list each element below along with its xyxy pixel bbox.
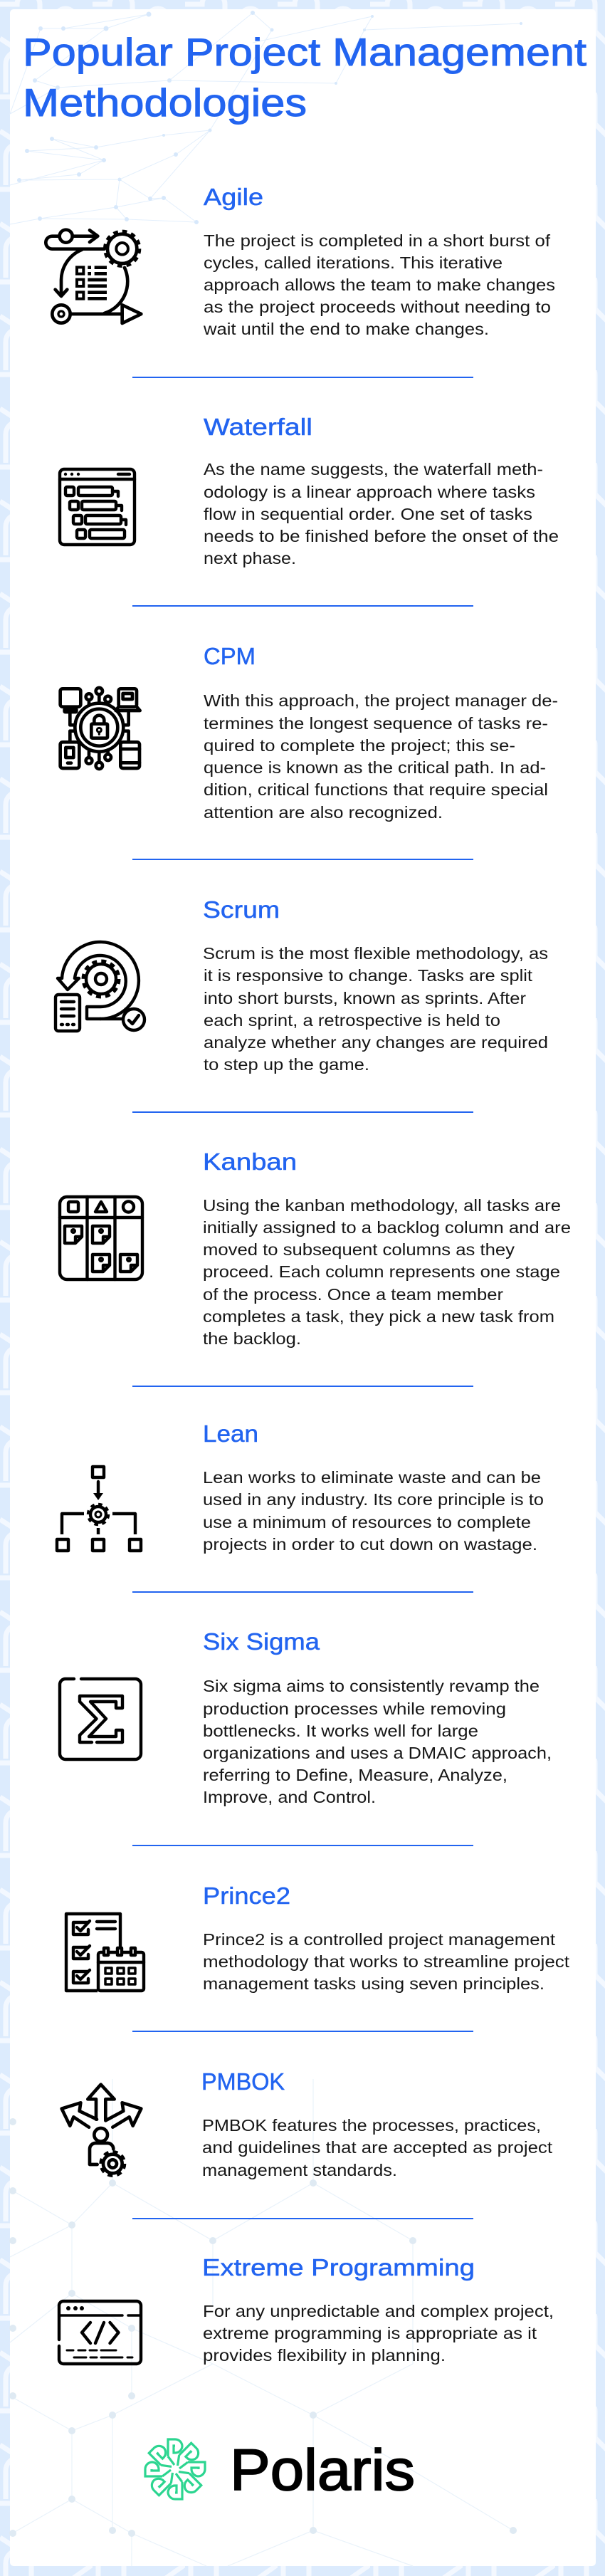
heading: Prince2: Prince2 [203,1883,290,1909]
text: PMBOK description: management standards. [202,2161,397,2179]
icon: waterfall chart window [60,469,135,545]
text: Scrum description: it is responsive to change. Tasks are split [204,966,533,985]
background network: bottom hexagons [9,2079,517,2566]
text: Waterfall description [204,460,559,567]
icon: critical path network lock [60,688,140,769]
text: Waterfall description: odology is a linear approach where tasks [204,483,535,501]
heading: PMBOK: PMBOK [201,2068,285,2095]
icon: sprint cycle gear [56,942,144,1031]
icon: code window [59,2301,141,2364]
text: Kanban description [203,1196,571,1348]
icon: checklist and calendar [66,1914,144,1991]
text: Waterfall description: next phase. [204,549,296,567]
text: CPM description: With this approach, the project manager de- [204,691,558,710]
title: Methodologies [23,80,307,125]
text: Six Sigma description: bottlenecks. It works well for large [203,1722,478,1740]
text: Six Sigma description: Six sigma aims to consistently revamp the [203,1677,540,1695]
background network: top [10,11,522,224]
text: Six Sigma description: referring to Define, Measure, Analyze, [203,1766,507,1784]
text: PMBOK description: PMBOK features the processes, practices, [202,2116,541,2135]
panel: Agile [46,184,555,338]
text: CPM description: dition, critical functions that require special [204,780,548,799]
text: Waterfall description: needs to be finished before the onset of the [204,527,559,545]
text: Agile description: as the project proceeds without needing to [204,298,551,316]
text: Scrum description [203,944,548,1074]
text: Kanban description: proceed. Each column represents one stage [203,1262,560,1281]
text: Agile description: approach allows the team to make changes [204,276,555,294]
wordmark: Polaris [230,2438,415,2503]
heading: Kanban: Kanban [203,1148,297,1175]
text: Six Sigma description: organizations and uses a DMAIC approach, [203,1744,552,1762]
text: Agile description: The project is completed in a short burst of [204,231,551,250]
icon: Polaris pinwheel [145,2439,205,2499]
heading: Scrum: Scrum [203,896,280,923]
text: Scrum description: analyze whether any changes are required [204,1033,548,1052]
icon: lean process tree [57,1467,141,1551]
panel: Extreme Programming [59,2254,554,2365]
text: PMBOK description [202,2116,553,2179]
text: CPM description: quence is known as the critical path. In ad- [204,758,546,777]
text: Prince2 description: management tasks using seven principles. [203,1974,544,1993]
text: Six Sigma description: production processes while removing [203,1700,506,1718]
heading: Waterfall: Waterfall [204,414,312,440]
text: Six Sigma description [203,1677,552,1806]
text: Agile description [203,231,555,338]
text: Kanban description: of the process. Once a team member [203,1285,503,1304]
text: Lean description: used in any industry. Its core principle is to [203,1490,544,1509]
panel: Scrum [56,896,548,1074]
text: Kanban description: initially assigned to a backlog column and are [203,1218,571,1237]
heading: Six Sigma: Six Sigma [203,1628,320,1655]
text: CPM description [204,691,558,822]
text: Extreme Programming description [203,2302,554,2365]
text: Lean description: projects in order to cut down on wastage. [203,1535,537,1554]
text: Prince2 description: Prince2 is a controlled project management [203,1930,556,1949]
text: Extreme Programming description: extreme programming is appropriate as it [203,2324,537,2342]
panel: PMBOK [62,2068,553,2179]
text: Lean description [203,1468,544,1554]
icon: sigma in frame [60,1679,141,1759]
text: Agile description: wait until the end to make changes. [203,320,489,338]
text: Lean description: use a minimum of resources to complete [203,1513,531,1532]
text: Scrum description: to step up the game. [204,1055,369,1074]
icon: person choosing directions [62,2085,141,2176]
text: Prince2 description [203,1930,570,1993]
panel: Lean [57,1420,544,1554]
text: CPM description: attention are also recognized. [204,803,443,822]
heading: Agile: Agile [204,184,263,210]
title [23,30,586,125]
text: PMBOK description: and guidelines that are accepted as project [202,2138,553,2157]
text: Prince2 description: methodology that works to streamline project [203,1952,570,1971]
text: Extreme Programming description: provides flexibility in planning. [203,2346,446,2365]
text: Agile description: cycles, called iterations. This iterative [204,253,503,272]
heading: Lean: Lean [203,1420,258,1447]
text: Scrum description: into short bursts, known as sprints. After [204,989,526,1007]
panel: Six Sigma [60,1628,552,1806]
icon: kanban board [60,1197,142,1279]
text: Six Sigma description: Improve, and Control. [203,1788,376,1806]
heading: Extreme Programming: Extreme Programming [202,2254,475,2281]
text: Kanban description: Using the kanban methodology, all tasks are [203,1196,561,1215]
text: Lean description: Lean works to eliminate waste and can be [203,1468,541,1487]
panel: CPM [60,643,558,822]
text: Scrum description: each sprint, a retrospective is held to [204,1011,500,1030]
icon: agile cycle [46,230,141,323]
title: Popular Project Management [23,30,586,74]
text: Kanban description: completes a task, they pick a new task from [203,1307,554,1326]
text: Kanban description: moved to subsequent columns as they [203,1240,515,1259]
text: Scrum description: Scrum is the most flexible methodology, as [203,944,548,963]
panel: Prince2 [66,1883,570,1993]
text: Kanban description: the backlog. [203,1329,301,1348]
text: Waterfall description: flow in sequential order. One set of tasks [204,505,532,523]
logo: Polaris [145,2438,415,2503]
panel: Waterfall [60,414,559,567]
text: CPM description: quired to complete the project; this se- [204,736,515,755]
text: CPM description: termines the longest sequence of tasks re- [204,714,548,733]
text: Waterfall description: As the name suggests, the waterfall meth- [204,460,543,478]
text: Extreme Programming description: For any unpredictable and complex project, [203,2302,554,2320]
panel: Kanban [60,1148,571,1348]
heading: CPM: CPM [204,643,256,669]
